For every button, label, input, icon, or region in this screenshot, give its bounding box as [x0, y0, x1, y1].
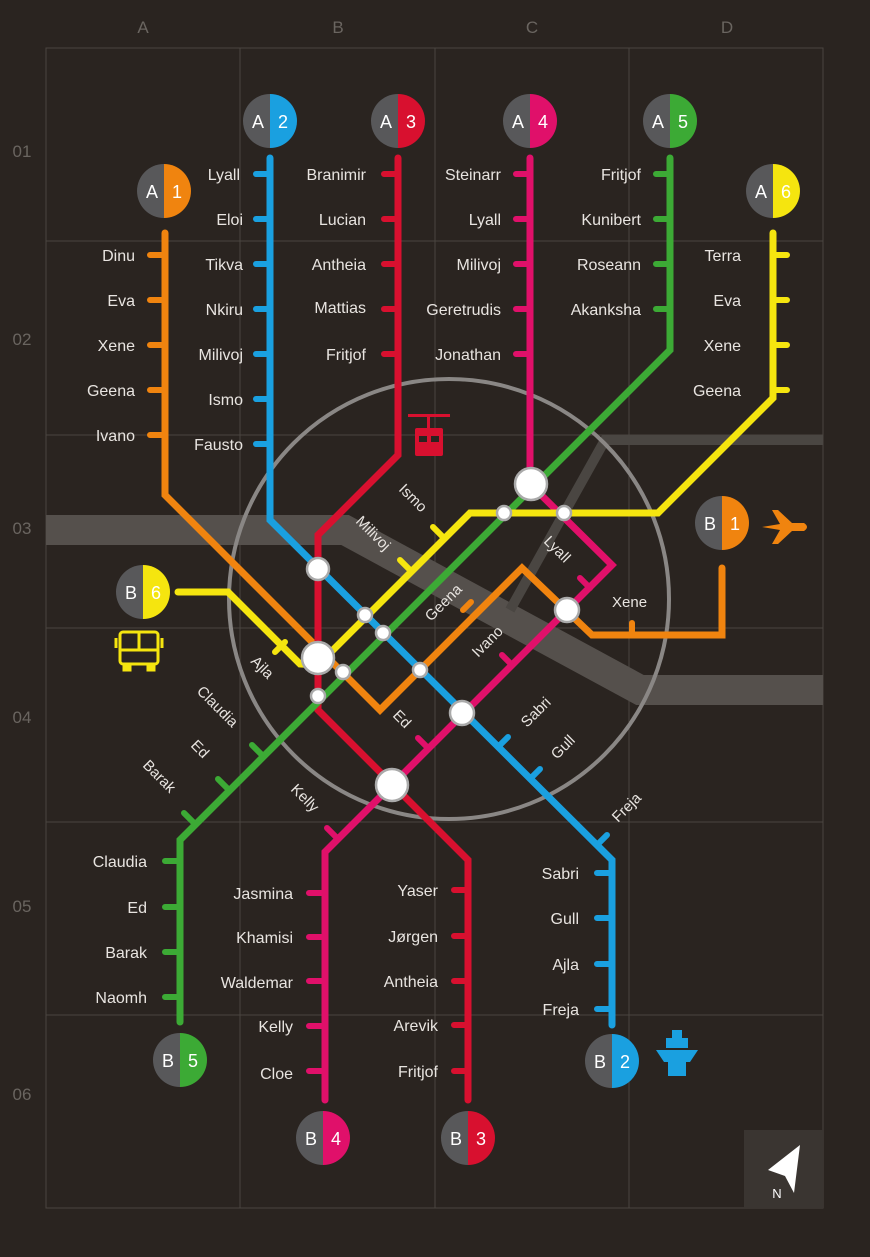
rotated labels: Milivoj — [352, 513, 394, 554]
terminus badges: B — [162, 1051, 174, 1071]
rotated labels: Xene — [612, 594, 647, 611]
terminus badges: 2 — [620, 1052, 630, 1072]
terminus badges: A — [755, 182, 767, 202]
terminus badges: 3 — [406, 112, 416, 132]
terminus badges: 2 — [278, 112, 288, 132]
terminus badges: 5 — [188, 1051, 198, 1071]
station labels: Steinarr — [445, 167, 502, 184]
terminus badges: A — [146, 182, 158, 202]
ring — [229, 379, 669, 819]
terminus badges — [116, 94, 800, 1165]
icon: cable car — [408, 414, 450, 456]
station labels: Eva — [107, 293, 135, 310]
station labels: Ismo — [208, 392, 243, 409]
icon: bus — [116, 632, 162, 670]
station labels: Milivoj — [457, 257, 501, 274]
station labels: Xene — [98, 338, 135, 355]
station labels: Lyall — [208, 167, 240, 184]
station labels: Jørgen — [388, 929, 438, 946]
river — [46, 530, 823, 690]
icon: ship — [656, 1030, 698, 1076]
station labels: Tikva — [205, 257, 243, 274]
station labels: Waldemar — [221, 975, 294, 992]
grid labels: 01 — [13, 142, 31, 161]
station labels: Barak — [105, 945, 148, 962]
station labels: Ed — [127, 900, 147, 917]
station labels: Xene — [704, 338, 741, 355]
road — [510, 440, 823, 610]
station labels: Sabri — [542, 866, 579, 883]
grid labels: A — [137, 18, 149, 37]
grid labels — [13, 18, 733, 1104]
station labels: Dinu — [102, 248, 135, 265]
station labels: Jonathan — [435, 347, 501, 364]
station labels: Mattias — [314, 300, 366, 317]
grid labels: B — [332, 18, 344, 37]
station labels: Gull — [551, 911, 579, 928]
north arrow — [744, 1130, 823, 1208]
rotated labels: Ed — [187, 737, 212, 762]
line A3/B3 red — [318, 158, 468, 1100]
terminus badges: A — [252, 112, 264, 132]
station labels: Freja — [543, 1002, 579, 1019]
grid labels: D — [721, 18, 733, 37]
station labels: Fritjof — [326, 347, 367, 364]
station labels: Cloe — [260, 1066, 293, 1083]
rotated labels: Ivano — [469, 623, 507, 661]
terminus badges: B — [305, 1129, 317, 1149]
grid labels: 05 — [13, 897, 31, 916]
station labels: Lucian — [319, 212, 366, 229]
rotated labels: Sabri — [518, 694, 555, 731]
station labels: Khamisi — [236, 930, 293, 947]
terminus badges: 6 — [781, 182, 791, 202]
station labels: Kunibert — [581, 212, 642, 229]
grid labels: C — [526, 18, 538, 37]
station labels: Kelly — [258, 1019, 293, 1036]
rotated labels: Claudia — [193, 683, 242, 731]
station labels: Yaser — [397, 883, 439, 900]
station labels: Antheia — [312, 257, 366, 274]
station labels: Claudia — [93, 854, 147, 871]
terminus badges: A — [512, 112, 524, 132]
station labels: Nkiru — [206, 302, 243, 319]
rotated labels: Barak — [139, 757, 179, 797]
terminus badges: 6 — [151, 583, 161, 603]
terminus badges: 3 — [476, 1129, 486, 1149]
rotated labels: Kelly — [287, 781, 323, 816]
station labels: Branimir — [306, 167, 367, 184]
station labels: Ajla — [552, 957, 579, 974]
station labels: Geretrudis — [426, 302, 501, 319]
terminus badges: 1 — [730, 514, 740, 534]
grid labels: 02 — [13, 330, 31, 349]
grid labels: 06 — [13, 1085, 31, 1104]
rotated labels: Ismo — [395, 481, 430, 516]
terminus badges: B — [704, 514, 716, 534]
station labels: Jasmina — [233, 886, 293, 903]
rotated labels: Ed — [389, 707, 414, 732]
station labels: Naomh — [95, 990, 147, 1007]
rotated labels: Lyall — [540, 533, 574, 566]
station labels: Eva — [713, 293, 741, 310]
terminus badges: B — [125, 583, 137, 603]
terminus badges: B — [450, 1129, 462, 1149]
north arrow: N — [772, 1186, 782, 1201]
line A4/B4 magenta — [309, 158, 612, 1100]
terminus badges: A — [380, 112, 392, 132]
station labels: Ivano — [96, 428, 135, 445]
rotated labels: Geena — [422, 580, 466, 625]
station labels: Terra — [705, 248, 741, 265]
grid labels: 04 — [13, 708, 31, 727]
grid labels: 03 — [13, 519, 31, 538]
terminus badges: B — [594, 1052, 606, 1072]
line A2/B2 blue — [256, 158, 612, 1025]
station labels: Fritjof — [601, 167, 642, 184]
station labels: Akanksha — [571, 302, 641, 319]
station labels: Lyall — [469, 212, 501, 229]
line A6/B6 yellow — [178, 233, 787, 665]
station labels: Arevik — [394, 1018, 439, 1035]
icon: airplane — [762, 510, 807, 544]
terminus badges: A — [652, 112, 664, 132]
rotated labels: Gull — [548, 732, 579, 763]
rotated labels: Freja — [609, 789, 645, 826]
terminus badges: 4 — [331, 1129, 341, 1149]
station labels: Fausto — [194, 437, 243, 454]
station labels: Geena — [693, 383, 741, 400]
line A5/B5 green — [165, 158, 670, 1022]
terminus badges: 1 — [172, 182, 182, 202]
station labels: Fritjof — [398, 1064, 439, 1081]
station labels: Eloi — [216, 212, 243, 229]
station labels — [87, 167, 741, 1083]
station labels: Roseann — [577, 257, 641, 274]
station labels: Geena — [87, 383, 135, 400]
station labels: Antheia — [384, 974, 438, 991]
terminus badges: 5 — [678, 112, 688, 132]
stations — [302, 468, 579, 801]
rotated labels: Ajla — [247, 653, 277, 683]
terminus badges: 4 — [538, 112, 548, 132]
rotated labels — [139, 481, 647, 826]
line A1/B1 orange — [150, 233, 722, 710]
station labels: Milivoj — [199, 347, 243, 364]
